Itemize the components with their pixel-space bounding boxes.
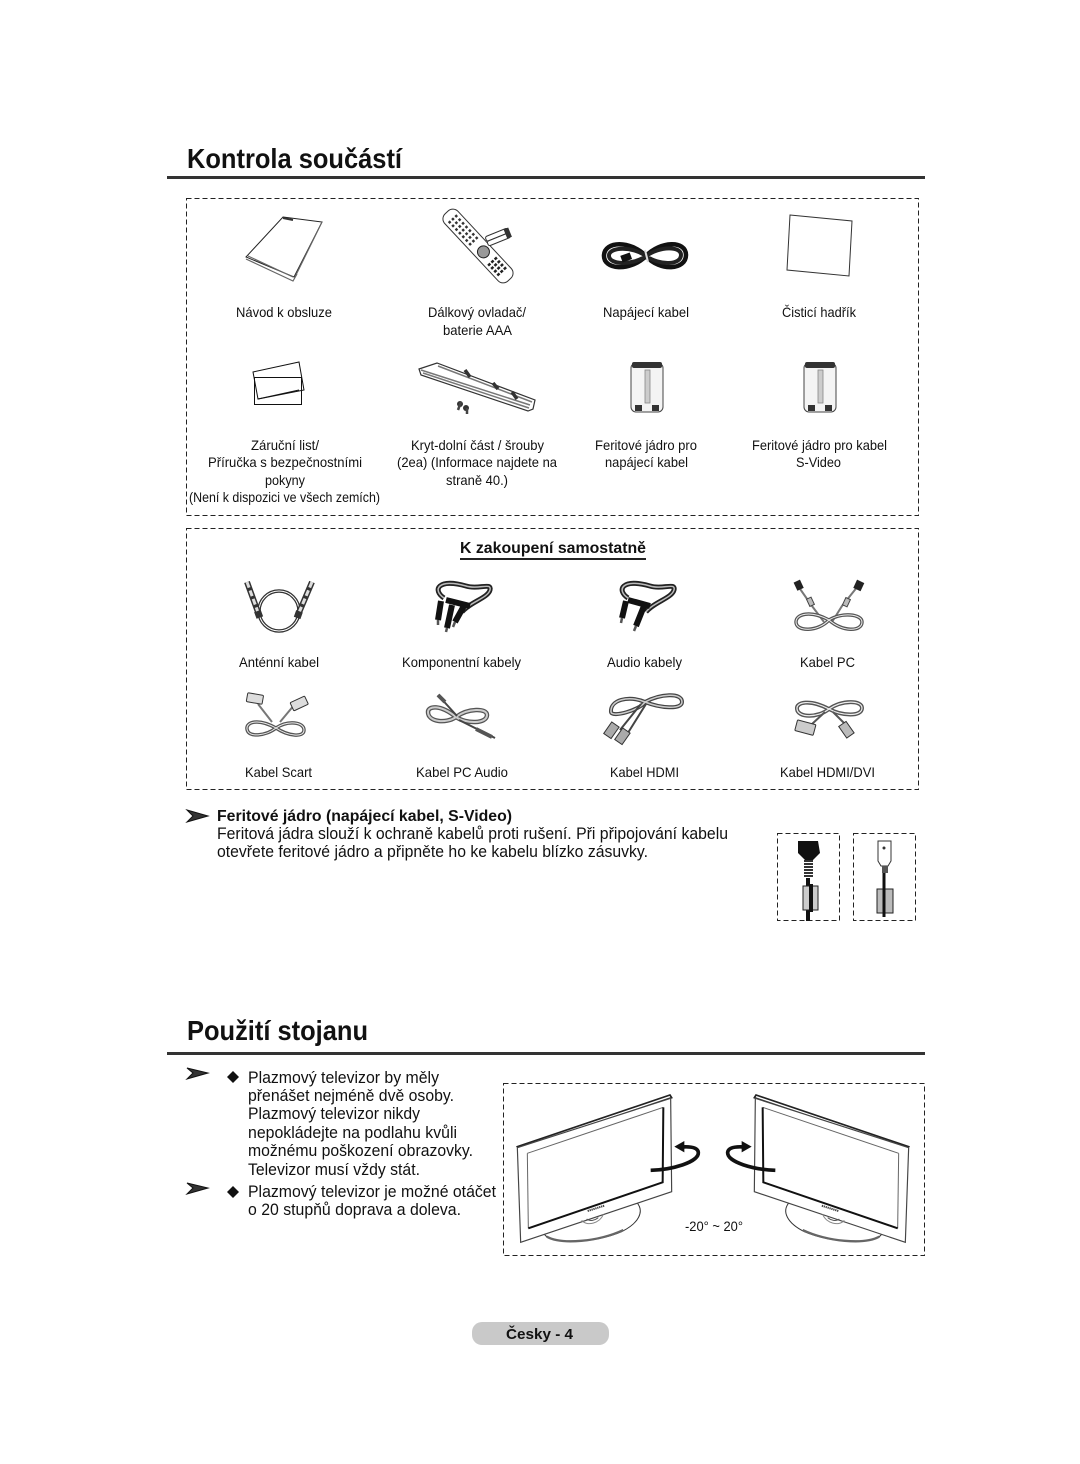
paragraph 2: Plazmový televizor je možné otáčet: [248, 1183, 496, 1201]
label: Anténní kabel: Anténní kabel: [239, 654, 319, 670]
note body: [217, 825, 728, 861]
note heading: Feritové jádro (napájecí kabel, S-Video): [217, 808, 512, 825]
icon: note arrow: [187, 810, 208, 822]
label: Kabel HDMI/DVI: Kabel HDMI/DVI: [780, 764, 875, 780]
note: ferrite core: [187, 808, 728, 861]
title: Kontrola součástí: Kontrola součástí: [187, 143, 403, 174]
page number pill: [472, 1322, 609, 1345]
label: Audio kabely: Audio kabely: [607, 654, 682, 670]
paragraph 1: Plazmový televizor nikdy: [248, 1105, 421, 1123]
label: Kabel PC Audio: Kabel PC Audio: [416, 764, 508, 780]
icon: HDMI cable: [604, 695, 682, 745]
label: Feritové jádro pro kabel S-Video: [752, 437, 887, 470]
paragraph 2: [248, 1183, 496, 1219]
label: Feritové jádro pro napájecí kabel: [595, 437, 697, 470]
paragraph 1: Plazmový televizor by měly: [248, 1069, 440, 1087]
panel: included components: [186, 198, 918, 516]
label: Napájecí kabel: Napájecí kabel: [603, 304, 689, 320]
paragraph 2: o 20 stupňů doprava a doleva.: [248, 1201, 461, 1219]
arrow: rotate left: [651, 1141, 698, 1170]
label: Kabel HDMI: Kabel HDMI: [610, 764, 679, 780]
label: Čisticí hadřík: Čisticí hadřík: [782, 304, 857, 320]
icon: audio cables: [621, 583, 674, 631]
label: Kryt-dolní část block: Kryt-dolní část / šrouby: [411, 437, 544, 453]
icon: power cable: [604, 244, 686, 267]
panel: sold separately: [186, 528, 918, 790]
icon: PC cable: [794, 580, 864, 629]
icon: PC audio cable: [428, 695, 495, 738]
paragraph 1: přenášet nejméně dvě osoby.: [248, 1087, 454, 1105]
label: Návod k obsluze: Návod k obsluze: [236, 304, 332, 320]
icon: Scart cable: [246, 693, 308, 735]
title: Použití stojanu: Použití stojanu: [187, 1015, 368, 1046]
label: Záruční list block: [189, 437, 380, 505]
angle label: -20° ~ 20°: [685, 1218, 743, 1234]
label: Feritové jádro pro napájecí kabel: Feritové jádro pro: [595, 437, 697, 453]
icon: note arrow 1: [187, 1068, 208, 1079]
label: Komponentní kabely: Komponentní kabely: [402, 654, 521, 670]
label: Dálkový ovladač / baterie AAA: baterie AAA: [443, 322, 513, 338]
icon: cleaning cloth: [787, 215, 852, 276]
label: Kabel PC: Kabel PC: [800, 654, 855, 670]
icon: antenna cable: [247, 582, 312, 631]
illustration: ferrite on S-Video cable: [854, 834, 916, 920]
icon: ferrite core for S-Video cable: [804, 362, 836, 412]
icon: HDMI/DVI cable: [795, 702, 862, 738]
heading: K zakoupení samostatně: K zakoupení samostatně: [460, 540, 646, 557]
label: Dálkový ovladač / baterie AAA: [428, 304, 526, 338]
label: Záruční list block: Záruční list/: [251, 437, 319, 453]
label: Záruční list block: (Není k dispozici ve všech zemích): [189, 489, 380, 505]
TV turned left: [517, 1095, 672, 1242]
text block: stand usage: [187, 1068, 496, 1219]
label: Kryt-dolní část block: straně 40.): [446, 472, 508, 488]
label: Dálkový ovladač / baterie AAA: Dálkový ovladač/: [428, 304, 526, 320]
icon: manual booklet: [246, 217, 322, 281]
page number pill: Česky - 4: [506, 1325, 574, 1343]
icon: bullet 2: [227, 1186, 239, 1198]
label: Feritové jádro pro napájecí kabel: napájecí kabel: [605, 454, 688, 470]
note body: otevřete feritové jádro a připněte ho ke kabelu blízko zásuvky.: [217, 843, 648, 861]
label: Kryt-dolní část block: (2ea) (Informace najdete na: [397, 454, 557, 470]
icon: note arrow 2: [187, 1183, 208, 1194]
label: Feritové jádro pro kabel S-Video: Feritové jádro pro kabel: [752, 437, 887, 453]
title: Použití stojanu: [167, 1015, 925, 1055]
title: Kontrola součástí: [167, 143, 925, 179]
label: Záruční list block: pokyny: [265, 472, 305, 488]
icon: component cables: [438, 583, 490, 632]
icon: ferrite core for power cable: [631, 362, 663, 412]
paragraph 1: možnému poškození obrazovky.: [248, 1142, 473, 1160]
paragraph 1: [248, 1069, 473, 1179]
label: Kabel Scart: Kabel Scart: [245, 764, 312, 780]
illustration: ferrite on power cable: [778, 834, 840, 921]
label: Feritové jádro pro kabel S-Video: S-Video: [796, 454, 841, 470]
icon: warranty cards: [253, 362, 304, 404]
label: Záruční list block: Příručka s bezpečnostními: [208, 454, 362, 470]
note body: Feritová jádra slouží k ochraně kabelů proti rušení. Při připojování kabelu: [217, 825, 728, 843]
TV turned right: [754, 1095, 909, 1242]
paragraph 1: Televizor musí vždy stát.: [248, 1161, 420, 1179]
paragraph 1: nepokládejte na podlahu kvůli: [248, 1124, 457, 1142]
label: Kryt-dolní část block: [397, 437, 557, 488]
icon: stand cover and screws: [419, 363, 535, 414]
illustration: TV swivel: [504, 1084, 924, 1256]
icon: bullet 1: [227, 1071, 239, 1083]
icon: remote control and batteries: [440, 206, 516, 286]
arrow: rotate right: [728, 1141, 775, 1170]
